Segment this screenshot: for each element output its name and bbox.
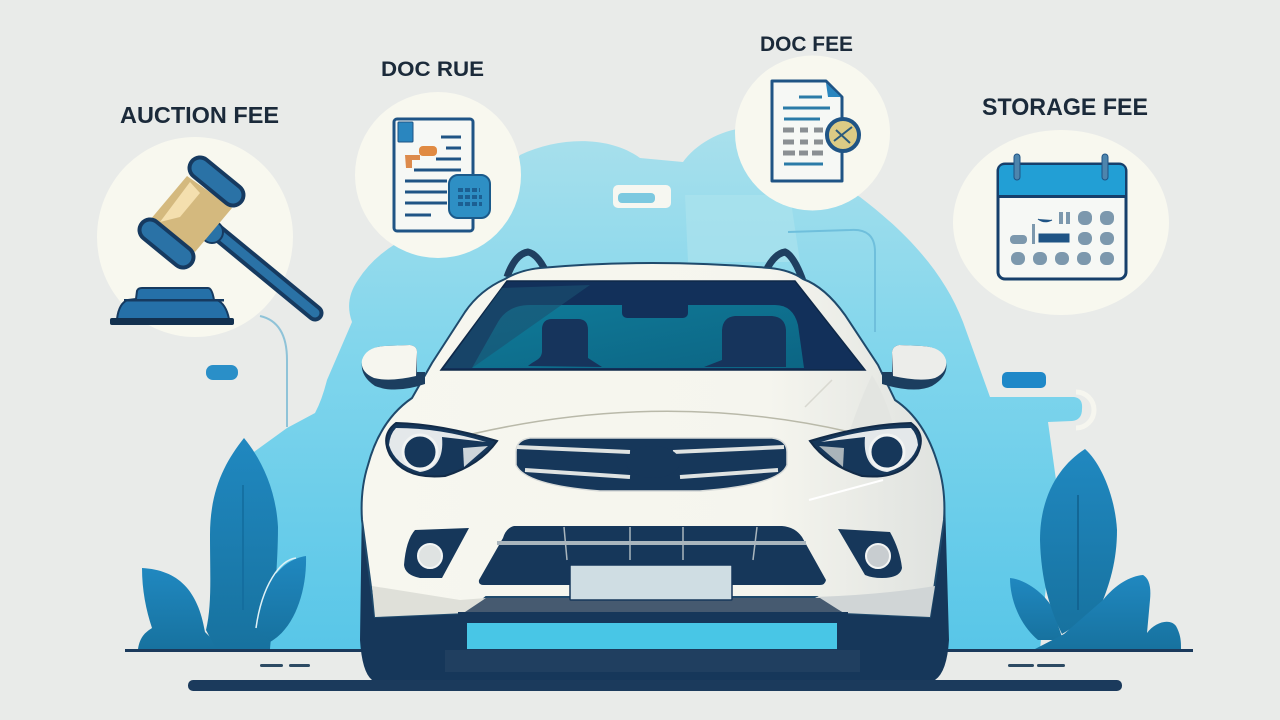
roof rails <box>507 252 803 281</box>
heading: doc fee: DOC FEE <box>760 33 853 56</box>
headlights <box>386 423 921 477</box>
left plant <box>138 438 306 649</box>
car body <box>362 263 944 617</box>
icon: document with seal <box>772 81 859 181</box>
lower grille <box>479 526 826 585</box>
decorative callout lines and pills <box>206 185 1094 428</box>
icon: calendar <box>998 154 1126 279</box>
heading: auction fee: AUCTION FEE <box>120 102 279 128</box>
circle background <box>97 137 293 337</box>
panel: storage fee <box>953 94 1169 315</box>
heading: storage fee: STORAGE FEE <box>982 94 1148 121</box>
windshield <box>441 281 865 370</box>
right plant <box>1010 449 1181 649</box>
circle background <box>735 56 890 210</box>
lower bumper <box>458 598 848 623</box>
ground lines <box>125 649 1193 691</box>
circle background <box>953 130 1169 315</box>
lighter backdrop panel <box>685 195 800 262</box>
front grille <box>516 438 787 491</box>
heading: doc rue: DOC RUE <box>381 58 484 81</box>
body shading <box>372 375 935 617</box>
blue cloud backdrop <box>240 128 1082 650</box>
circle background <box>355 92 521 258</box>
panel: auction fee <box>97 102 315 337</box>
panel: doc rue <box>355 58 521 258</box>
car <box>360 252 949 680</box>
fog lights <box>404 528 902 578</box>
icon: document with badge <box>394 119 490 231</box>
mirrors <box>362 345 946 390</box>
panel: doc fee <box>735 33 890 210</box>
icon: gavel <box>110 168 315 325</box>
license plate <box>570 565 732 600</box>
tires and underbody <box>360 500 949 680</box>
